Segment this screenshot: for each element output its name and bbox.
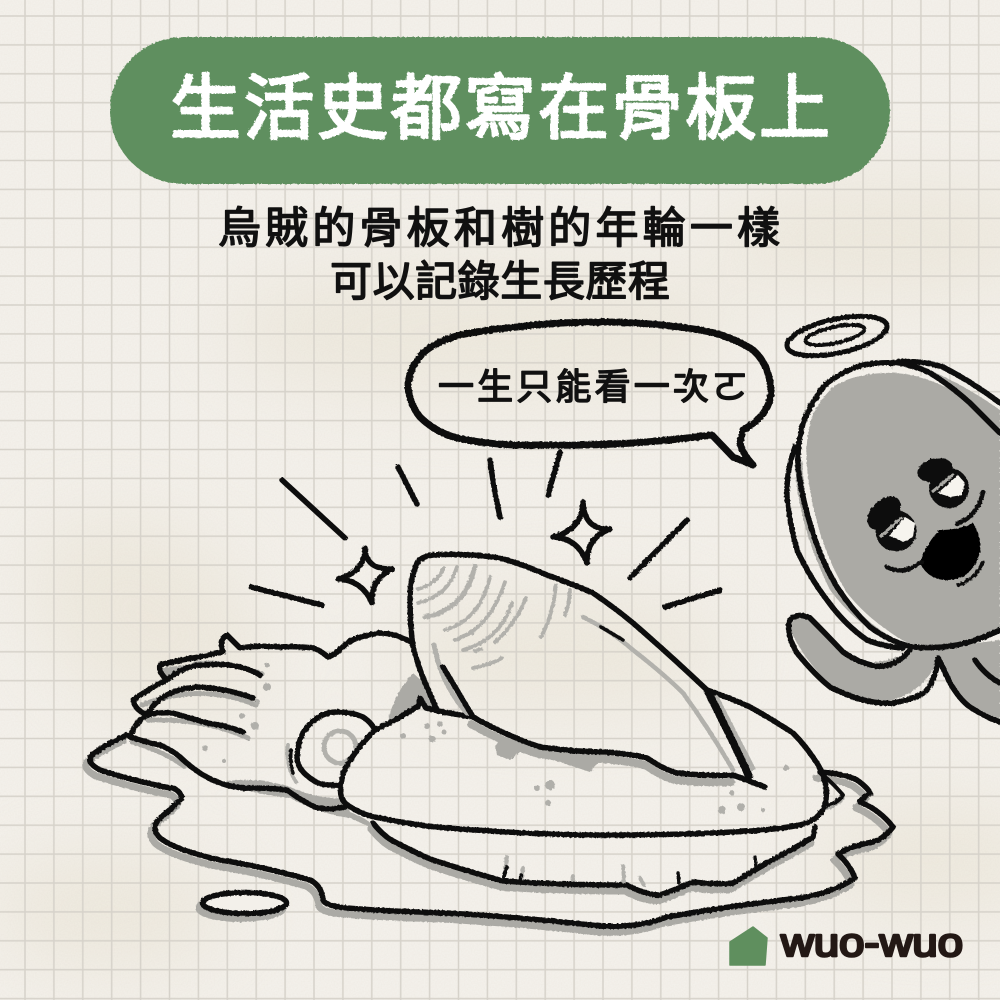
right fin tip: [820, 773, 843, 808]
body: [340, 690, 826, 835]
cuttlebone: [410, 554, 752, 776]
eye left: [861, 490, 916, 552]
illustration: dead cuttlefish on puddle: [86, 554, 893, 932]
subtitle line 1: 烏賊的骨板和樹的年輪一樣: [218, 205, 780, 253]
icon: sparkle right: [553, 502, 610, 563]
icon: sparkle left: [338, 548, 392, 603]
lower fin plate: [371, 823, 815, 901]
head: [787, 362, 1000, 650]
growth rings: [418, 566, 570, 668]
arm shadows: [132, 663, 262, 766]
title text: 生活史都寫在骨板上: [170, 70, 830, 149]
green pill: [110, 37, 890, 184]
eye right: [915, 454, 969, 508]
bubble outline: [408, 322, 771, 465]
grey shape behind cuttlebone: [387, 673, 433, 723]
sparkle rays: [251, 452, 720, 607]
speech bubble: [408, 322, 771, 465]
logo wordmark: wuo-wuo: [780, 921, 963, 965]
head shadow: [222, 780, 372, 828]
icon: house: [730, 927, 767, 965]
character: octopus angel: [784, 309, 1000, 722]
logo: [730, 921, 963, 965]
halo: [784, 309, 890, 363]
small puddle: [199, 892, 286, 918]
speckles: [202, 662, 789, 814]
eyes: [861, 454, 969, 552]
puddle: [86, 735, 893, 932]
arms and head outline: [127, 633, 413, 809]
bubble text: 一生只能看一次ㄛ: [438, 366, 748, 407]
mouth: [887, 492, 983, 585]
eye: [287, 712, 375, 785]
title banner: [110, 37, 890, 184]
tentacles: [789, 615, 1000, 722]
subtitle line 2: 可以記錄生長歷程: [330, 258, 670, 305]
subtitle: [218, 205, 780, 305]
